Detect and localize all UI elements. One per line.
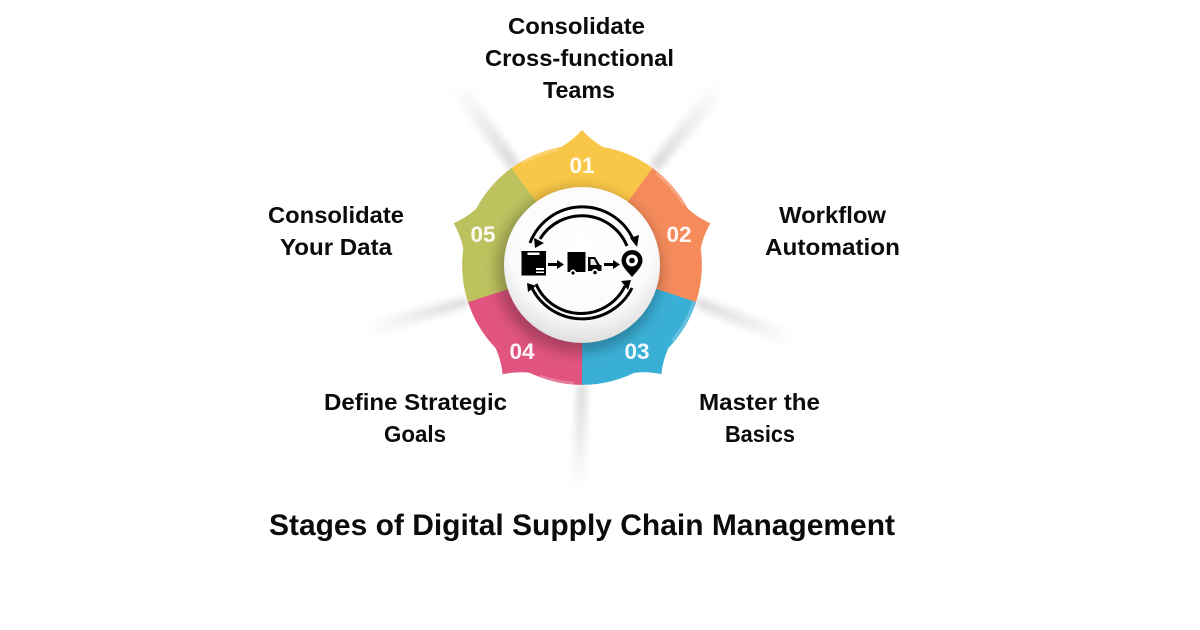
icon: truck [568,252,602,276]
label: stage 5 [268,202,404,260]
label: stage 2: Automation [765,234,900,260]
icon: box [522,251,546,276]
label: stage 1: Cross-functional [485,45,674,71]
label: stage 4: Define Strategic [324,389,507,415]
label: stage 5: Consolidate [268,202,404,228]
title: Stages of Digital Supply Chain Management [269,509,895,542]
icon: location pin [622,250,642,277]
number 02: 02 [666,222,692,247]
label: stage 3: Basics [725,421,795,447]
label: stage 4 [324,389,507,447]
icon: supply chain cycle [522,207,642,319]
arrowheads [527,235,639,292]
icon: arrow [548,260,564,269]
centre disc [504,187,660,343]
segment 04 [446,275,602,416]
label: stage 4: Goals [384,421,446,447]
icon: arrow [604,260,620,269]
centre shadow [496,187,662,353]
label: stage 1: Teams [543,77,615,103]
label: stage 1: Consolidate [508,13,645,39]
segment 01 [512,130,652,202]
label: stage 1 [485,13,674,103]
number 01: 01 [569,153,595,178]
segment 03 [562,275,718,416]
number 05: 05 [470,222,496,247]
cycle arrows [530,207,633,319]
label: stage 2: Workflow [779,202,887,228]
cycle wheel [432,130,732,416]
label: stage 3 [699,389,820,447]
label: stage 2 [765,202,900,260]
number 04: 04 [509,339,535,364]
light rays behind the wheel [360,80,798,492]
label: stage 5: Your Data [280,234,393,260]
segment 02 [620,156,732,313]
rim highlights [522,150,694,383]
segment 05 [432,156,544,313]
number 03: 03 [624,339,650,364]
label: stage 3: Master the [699,389,820,415]
